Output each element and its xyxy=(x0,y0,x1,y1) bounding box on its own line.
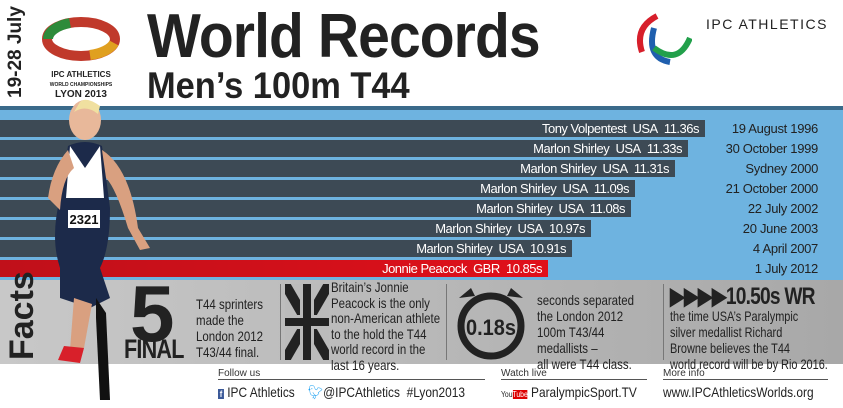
fact 2: union jack: Peacock is the only xyxy=(331,294,430,310)
dates: 19 August 1996 xyxy=(732,121,818,136)
fact 3: stopwatch: 100m T43/44 xyxy=(537,324,604,340)
footer: f IPC Athletics 🐦︎@IPCAthletics #Lyon2013 xyxy=(220,384,465,400)
fact 1: FINAL xyxy=(124,334,184,364)
watch live xyxy=(501,368,647,380)
blue records band: 30 October 1999 xyxy=(726,141,818,156)
event logo: LYON 2013 xyxy=(55,89,107,100)
fact 3: stopwatch: seconds separated xyxy=(537,292,634,308)
blue records band: Marlon Shirley USA 11.31s xyxy=(520,161,669,176)
blue records band: 1 July 2012 xyxy=(755,261,818,276)
blue records band: Marlon Shirley USA 11.09s xyxy=(480,181,629,196)
record bars xyxy=(0,120,705,137)
record bars: Tony Volpentest USA 11.36s xyxy=(542,121,699,136)
footer: YouTube ParalympicSport.TV xyxy=(501,384,637,400)
fact 4: predicted WR: the time USA’s Paralympic xyxy=(670,308,798,324)
fact 2: union jack xyxy=(280,284,450,360)
blue records band: 20 June 2003 xyxy=(743,221,818,236)
blue records band: Jonnie Peacock GBR 10.85s xyxy=(382,261,542,276)
fact 4: predicted WR: silver medallist Richard xyxy=(670,324,782,340)
runner photo (simplified) xyxy=(48,100,150,400)
more info: More info xyxy=(663,368,705,379)
event logo xyxy=(42,17,120,100)
IPC Athletics logo: IPC ATHLETICS xyxy=(706,16,828,32)
facts band: world record will be by Rio 2016. xyxy=(670,356,828,372)
fact 2: union jack: to the hold the T44 xyxy=(331,326,427,342)
facts band xyxy=(0,280,843,364)
fact 2: union jack: world record in the xyxy=(331,341,425,357)
fact 3: stopwatch: the London 2012 xyxy=(537,308,623,324)
header date: 19-28 July xyxy=(5,6,26,98)
blue records band: Marlon Shirley USA 10.91s xyxy=(416,241,566,256)
blue records band: 22 July 2002 xyxy=(748,201,818,216)
fact 3: stopwatch: medallists – xyxy=(537,340,598,356)
title: Men’s 100m T44 xyxy=(147,65,410,106)
event logo: IPC ATHLETICS xyxy=(51,70,111,79)
fact 4: predicted WR: ▶▶▶▶10.50s WR xyxy=(670,283,815,310)
fact 1: T43/44 final. xyxy=(196,344,259,360)
watch live: Watch live xyxy=(501,368,547,379)
fact 2: union jack: Britain’s Jonnie xyxy=(331,279,409,295)
runner photo (simplified): 2321 xyxy=(70,212,98,227)
IPC Athletics logo xyxy=(636,13,828,65)
fact 1: T44 sprinters xyxy=(196,296,263,312)
blue records band: 21 October 2000 xyxy=(726,181,818,196)
blue records band: 4 April 2007 xyxy=(753,241,818,256)
blue records band xyxy=(0,106,843,280)
fact 3: stopwatch xyxy=(446,284,656,360)
fact 1: London 2012 xyxy=(196,328,263,344)
footer: www.IPCAthleticsWorlds.org xyxy=(663,384,814,400)
title xyxy=(147,2,540,106)
blue records band: Marlon Shirley USA 11.33s xyxy=(533,141,682,156)
fact 3: stopwatch: 0.18s xyxy=(466,315,516,340)
fact 4: predicted WR xyxy=(663,284,843,360)
fact 1: 5 xyxy=(130,269,174,358)
text: last 16 years. xyxy=(331,356,399,372)
blue records band: Marlon Shirley USA 11.08s xyxy=(476,201,625,216)
blue records band: Sydney 2000 xyxy=(745,161,818,176)
footer xyxy=(218,368,828,400)
fact 4: predicted WR: Browne believes the T44 xyxy=(670,340,790,356)
blue records band: Marlon Shirley USA 10.97s xyxy=(435,221,585,236)
event logo: WORLD CHAMPIONSHIPS xyxy=(50,82,112,88)
more info xyxy=(663,368,828,380)
fact 1 xyxy=(124,269,263,364)
follow us xyxy=(218,368,485,380)
fact 2: union jack: non-American athlete xyxy=(331,310,440,326)
title: World Records xyxy=(147,2,540,71)
follow us: Follow us xyxy=(218,368,260,379)
fact 1: made the xyxy=(196,312,244,328)
facts band: all were T44 class. xyxy=(537,356,632,372)
facts label: Facts xyxy=(3,271,41,360)
